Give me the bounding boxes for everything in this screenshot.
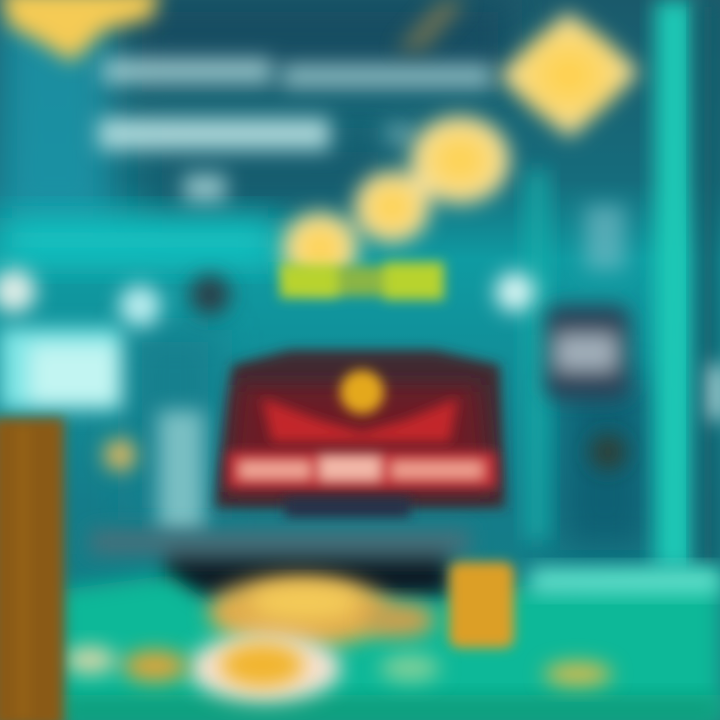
sign red burst (262, 398, 458, 442)
casino sign (215, 350, 505, 518)
green floor (60, 568, 720, 720)
gold coin stack (449, 562, 514, 648)
floor coins (64, 646, 612, 686)
sign title (228, 452, 496, 488)
dark panel right (545, 205, 720, 420)
sign base (285, 498, 410, 518)
light panel left (0, 328, 122, 410)
teal vertical stripes (524, 0, 720, 570)
floating gold coins (0, 0, 640, 284)
wooden pillar (0, 418, 64, 720)
floating round icons (0, 269, 626, 471)
lightning accent (395, 0, 468, 50)
yellow-green label (280, 262, 444, 300)
coin pile and plate (189, 576, 435, 702)
pale column (158, 410, 204, 535)
dark counter (90, 530, 470, 600)
heading text (illegible blur) (98, 58, 492, 202)
sign star (340, 370, 384, 414)
